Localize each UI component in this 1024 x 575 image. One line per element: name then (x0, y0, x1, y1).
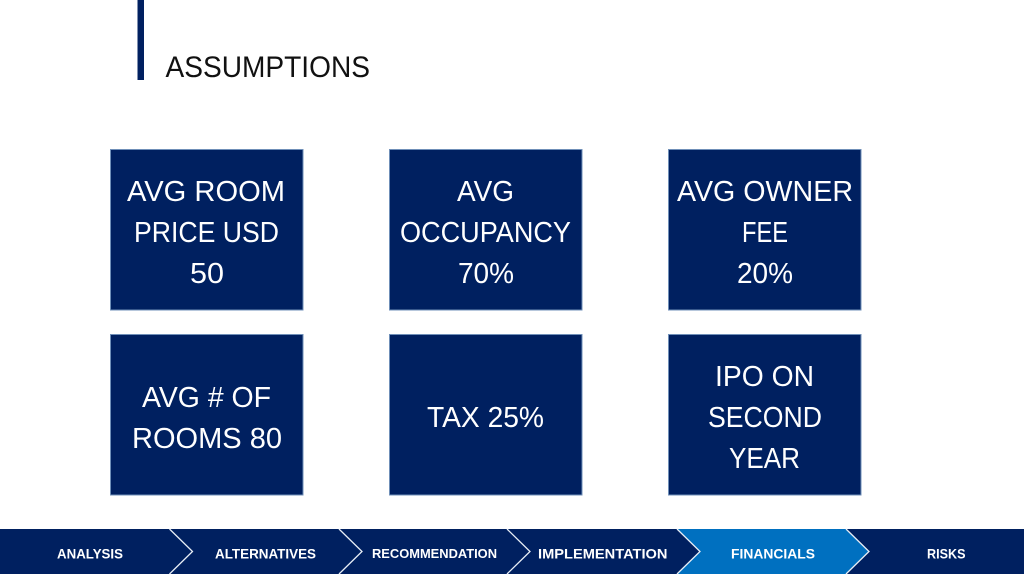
panel: IPO timing: YEAR (729, 443, 800, 475)
panel: average number of rooms: ROOMS 80 (132, 423, 282, 455)
panel: average owner fee (668, 150, 861, 310)
panel: IPO timing (668, 334, 861, 495)
panel: average number of rooms (110, 334, 303, 495)
navigation bar: ALTERNATIVES (215, 546, 316, 562)
panel: average occupancy: OCCUPANCY (400, 217, 571, 249)
panel: tax: TAX 25% (427, 402, 544, 434)
panel: average number of rooms: AVG # OF (142, 382, 271, 414)
panel: average owner fee: 20% (737, 258, 793, 290)
navigation bar: RISKS (927, 546, 966, 562)
accent bar (138, 0, 144, 80)
title: ASSUMPTIONS (166, 51, 370, 84)
navigation bar: RECOMMENDATION (372, 546, 497, 561)
panel: average occupancy: 70% (458, 258, 514, 290)
panel: average owner fee: AVG OWNER (677, 176, 853, 208)
panel: average occupancy (390, 150, 582, 310)
panel: average owner fee: FEE (742, 217, 788, 249)
navigation bar: IMPLEMENTATION (538, 546, 668, 562)
panel: average room price: PRICE USD (134, 217, 279, 249)
panel: IPO timing: IPO ON (715, 361, 814, 393)
navigation bar: ANALYSIS (57, 546, 123, 562)
panel: average room price (110, 150, 303, 310)
navigation bar (0, 529, 1024, 574)
panel: average room price: 50 (190, 258, 224, 290)
panel: IPO timing: SECOND (708, 402, 822, 434)
panel: average occupancy: AVG (457, 176, 514, 208)
navigation bar: FINANCIALS (731, 546, 815, 562)
panel: average room price: AVG ROOM (127, 176, 285, 208)
panel: tax (390, 334, 582, 495)
